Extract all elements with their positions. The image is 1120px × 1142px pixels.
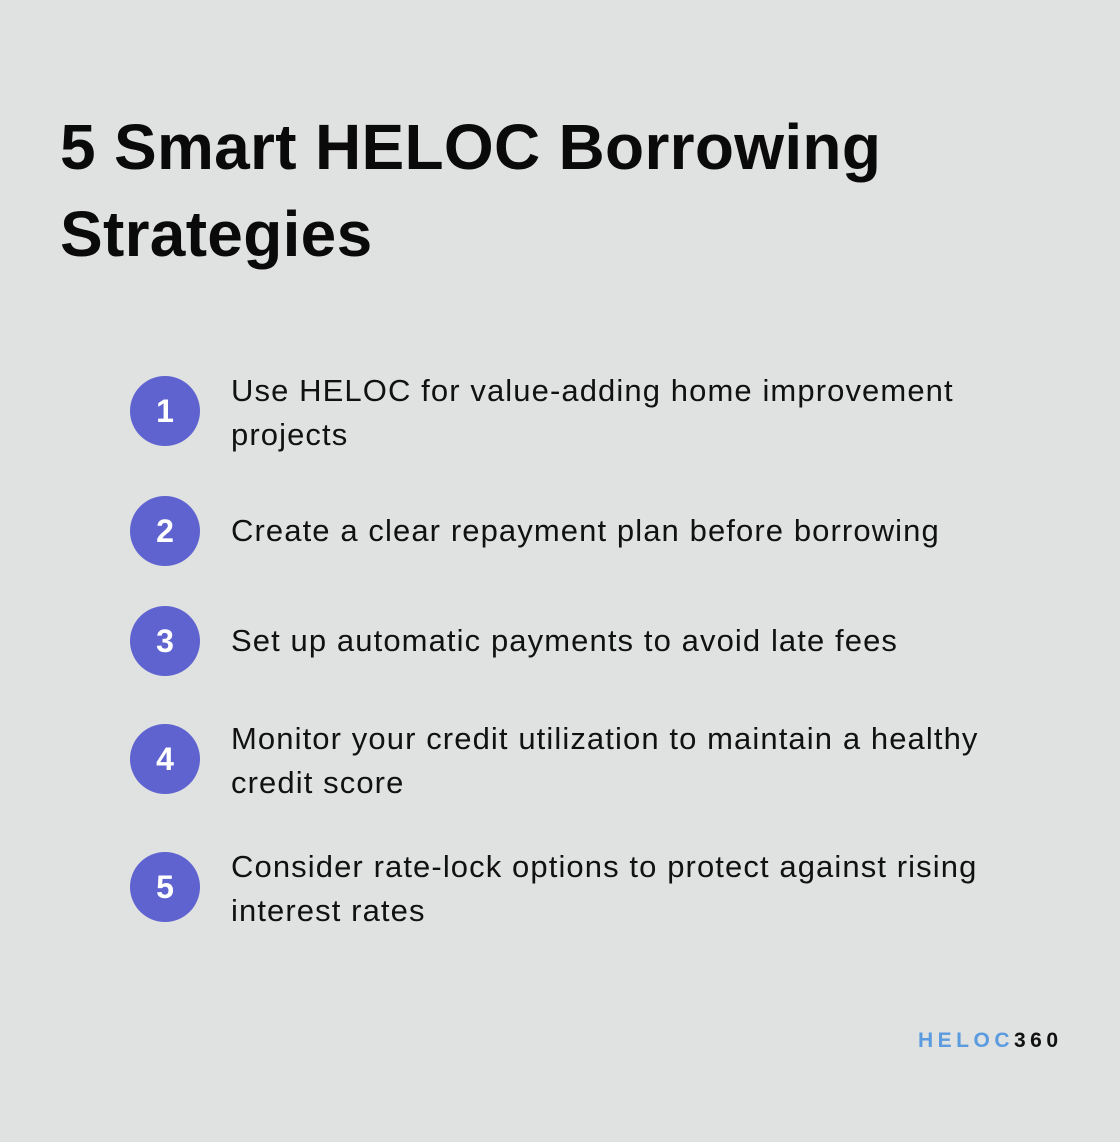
- badge 3: [130, 606, 200, 676]
- item 2: [130, 496, 940, 566]
- item 5: [130, 849, 977, 928]
- text 1: Use HELOC for value-adding home improvement: [231, 373, 954, 408]
- title: 5 Smart HELOC Borrowing: [60, 111, 881, 183]
- text 5: [231, 849, 977, 928]
- badge 5: 5: [156, 869, 174, 905]
- text 3: Set up automatic payments to avoid late fees: [231, 623, 898, 658]
- item 1: [130, 373, 954, 452]
- title: Strategies: [60, 198, 372, 270]
- item 4: [130, 721, 979, 800]
- text 1: projects: [231, 417, 348, 452]
- text 5: interest rates: [231, 893, 426, 928]
- text 5: Consider rate-lock options to protect against rising: [231, 849, 977, 884]
- text 4: credit score: [231, 765, 404, 800]
- item 3: [130, 606, 898, 676]
- title: [60, 111, 881, 270]
- logo: HELOC360: [918, 1029, 1063, 1052]
- badge 3: 3: [156, 623, 174, 659]
- badge 2: 2: [156, 513, 174, 549]
- text 4: [231, 721, 979, 800]
- badge 4: [130, 724, 200, 794]
- badge 5: [130, 852, 200, 922]
- badge 1: 1: [156, 393, 174, 429]
- badge 4: 4: [156, 741, 174, 777]
- badge 1: [130, 376, 200, 446]
- text 4: Monitor your credit utilization to maintain a healthy: [231, 721, 979, 756]
- text 2: Create a clear repayment plan before borrowing: [231, 513, 940, 548]
- badge 2: [130, 496, 200, 566]
- text 1: [231, 373, 954, 452]
